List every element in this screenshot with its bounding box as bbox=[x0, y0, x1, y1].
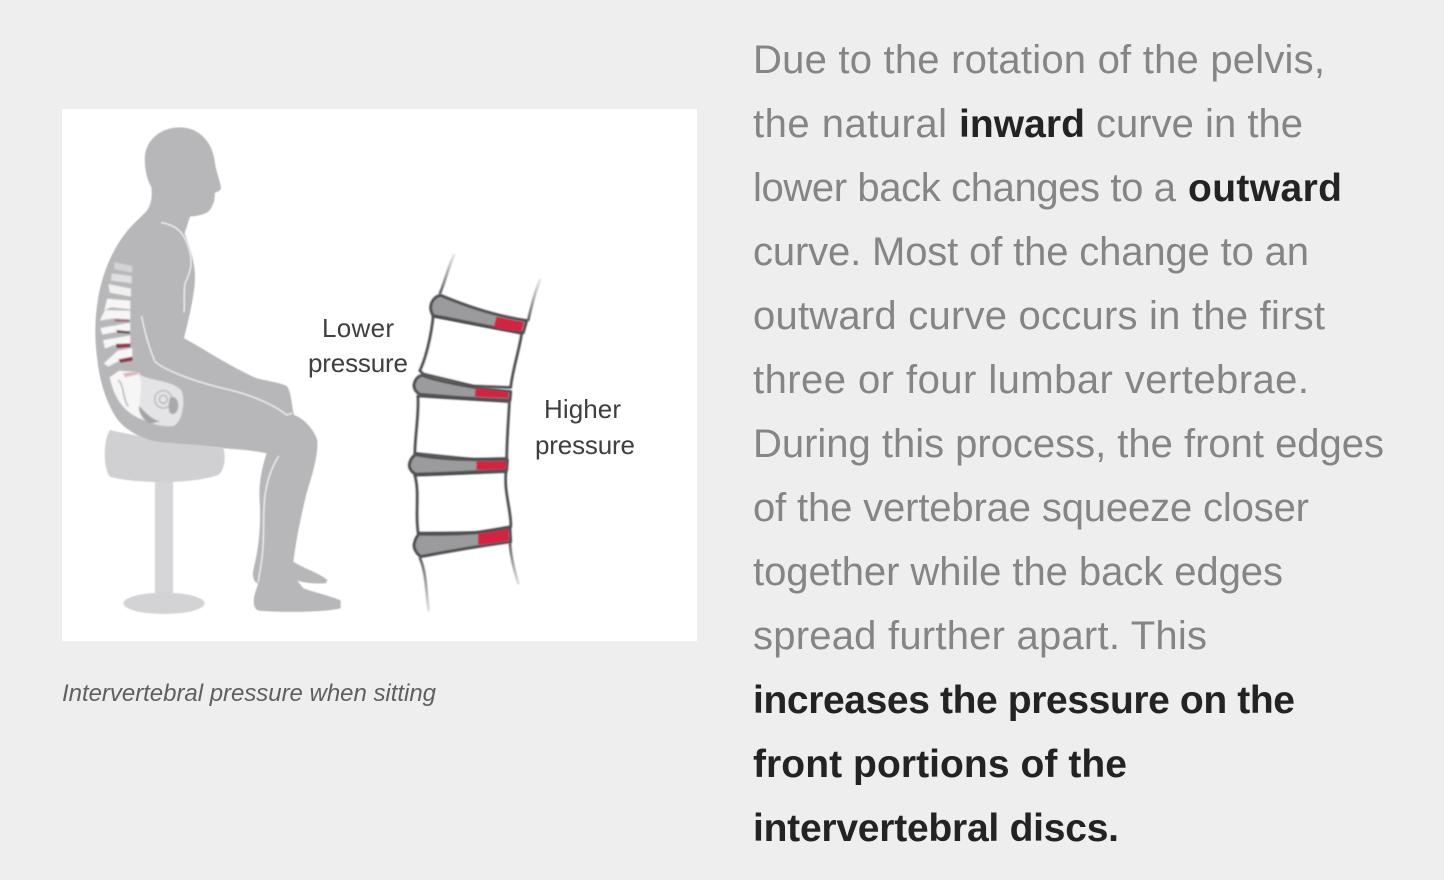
body text paragraph: front portions of the bbox=[753, 743, 1127, 786]
hip bone bbox=[138, 374, 183, 426]
spine segment diagram bbox=[409, 255, 540, 610]
seated figure silhouette bbox=[95, 127, 341, 612]
illustration panel bbox=[62, 109, 697, 641]
body text paragraph: Due to the rotation of the pelvis, bbox=[753, 38, 1325, 82]
spine and pelvis detail bbox=[100, 262, 183, 426]
body text paragraph: intervertebral discs. bbox=[753, 807, 1119, 850]
intervertebral discs bbox=[409, 295, 527, 557]
body text paragraph: outward bbox=[1188, 167, 1342, 210]
label: lower pressure: Lower bbox=[322, 313, 394, 343]
body text paragraph: increases the pressure on the bbox=[753, 679, 1295, 722]
red high-pressure zones bbox=[475, 317, 524, 545]
label: higher pressure: pressure bbox=[535, 430, 635, 460]
stool bbox=[105, 430, 225, 614]
body text paragraph bbox=[753, 38, 1384, 850]
body text paragraph: outward curve occurs in the first bbox=[753, 294, 1325, 338]
body text paragraph: of the vertebrae squeeze closer bbox=[753, 486, 1309, 530]
body text paragraph: lower back changes to a bbox=[753, 166, 1177, 210]
label: lower pressure: pressure bbox=[308, 348, 408, 378]
upper and lower spine tails bbox=[420, 255, 540, 610]
body text paragraph: spread further apart. This bbox=[753, 614, 1207, 658]
body text paragraph: inward bbox=[959, 103, 1085, 146]
body text paragraph: three or four lumbar vertebrae. bbox=[753, 358, 1309, 402]
label: higher pressure: Higher bbox=[544, 394, 621, 424]
body text paragraph: together while the back edges bbox=[753, 550, 1283, 594]
label: lower pressure bbox=[308, 313, 408, 378]
body text paragraph: curve in the bbox=[1096, 102, 1303, 146]
body contour lines bbox=[142, 223, 292, 582]
body text paragraph: During this process, the front edges bbox=[753, 422, 1384, 466]
body text paragraph: the natural bbox=[753, 102, 947, 146]
vertebra outlines bbox=[415, 316, 522, 533]
label: higher pressure bbox=[535, 394, 635, 460]
body text paragraph: curve. Most of the change to an bbox=[753, 230, 1309, 274]
image caption: Intervertebral pressure when sitting bbox=[62, 680, 437, 707]
